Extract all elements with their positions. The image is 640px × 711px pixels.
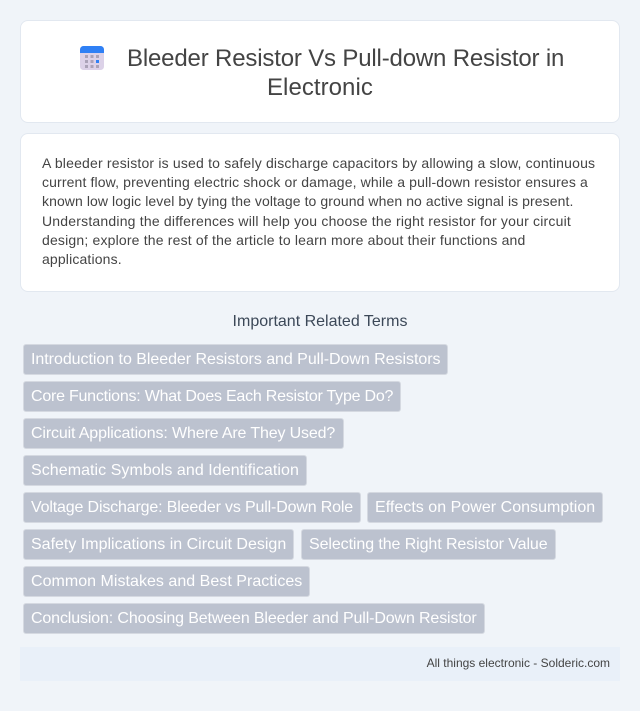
summary text: design; explore the rest of the article to learn more about their functions and: [42, 232, 526, 248]
tag: [301, 529, 556, 560]
summary text: A bleeder resistor is used to safely discharge capacitors by allowing a slow, continuous: [42, 155, 595, 171]
tag: [23, 344, 448, 375]
tag: [367, 492, 603, 523]
footer: [20, 647, 620, 681]
summary text: current flow, preventing electric shock or damage, while a pull-down resistor ensures a: [42, 174, 588, 190]
summary text: [42, 155, 595, 267]
tag: Introduction to Bleeder Resistors and Pull-Down Resistors: [31, 351, 440, 368]
tag: Safety Implications in Circuit Design: [31, 536, 286, 553]
related terms heading: Important Related Terms: [233, 313, 407, 330]
tag: Selecting the Right Resistor Value: [309, 536, 548, 553]
summary text: Understanding the differences will help you choose the right resistor for your circuit: [42, 213, 571, 229]
tag: [23, 418, 344, 449]
summary text: known low logic level by tying the voltage to ground when no active signal is present.: [42, 193, 573, 209]
tag: [23, 529, 294, 560]
tag: [23, 566, 310, 597]
summary card: [20, 133, 620, 292]
summary text: applications.: [42, 251, 122, 267]
title: Bleeder Resistor Vs Pull-down Resistor in: [127, 45, 564, 72]
tag: Voltage Discharge: Bleeder vs Pull-Down Role: [31, 499, 353, 516]
tag: Schematic Symbols and Identification: [31, 462, 299, 479]
tag: [23, 603, 485, 634]
title: Electronic: [267, 74, 373, 101]
tag: Effects on Power Consumption: [375, 499, 595, 516]
tag: [23, 455, 307, 486]
tag: Core Functions: What Does Each Resistor Type Do?: [31, 388, 393, 405]
tag: [23, 381, 401, 412]
title: [127, 45, 564, 101]
header card: [20, 20, 620, 123]
icon: calendar: [80, 46, 104, 70]
tag: Circuit Applications: Where Are They Used?: [31, 425, 335, 442]
footer text: All things electronic - Solderic.com: [427, 656, 610, 670]
tag: [23, 492, 361, 523]
related terms tags: [23, 344, 603, 634]
tag: Conclusion: Choosing Between Bleeder and Pull-Down Resistor: [31, 610, 477, 627]
tag: Common Mistakes and Best Practices: [31, 573, 302, 590]
